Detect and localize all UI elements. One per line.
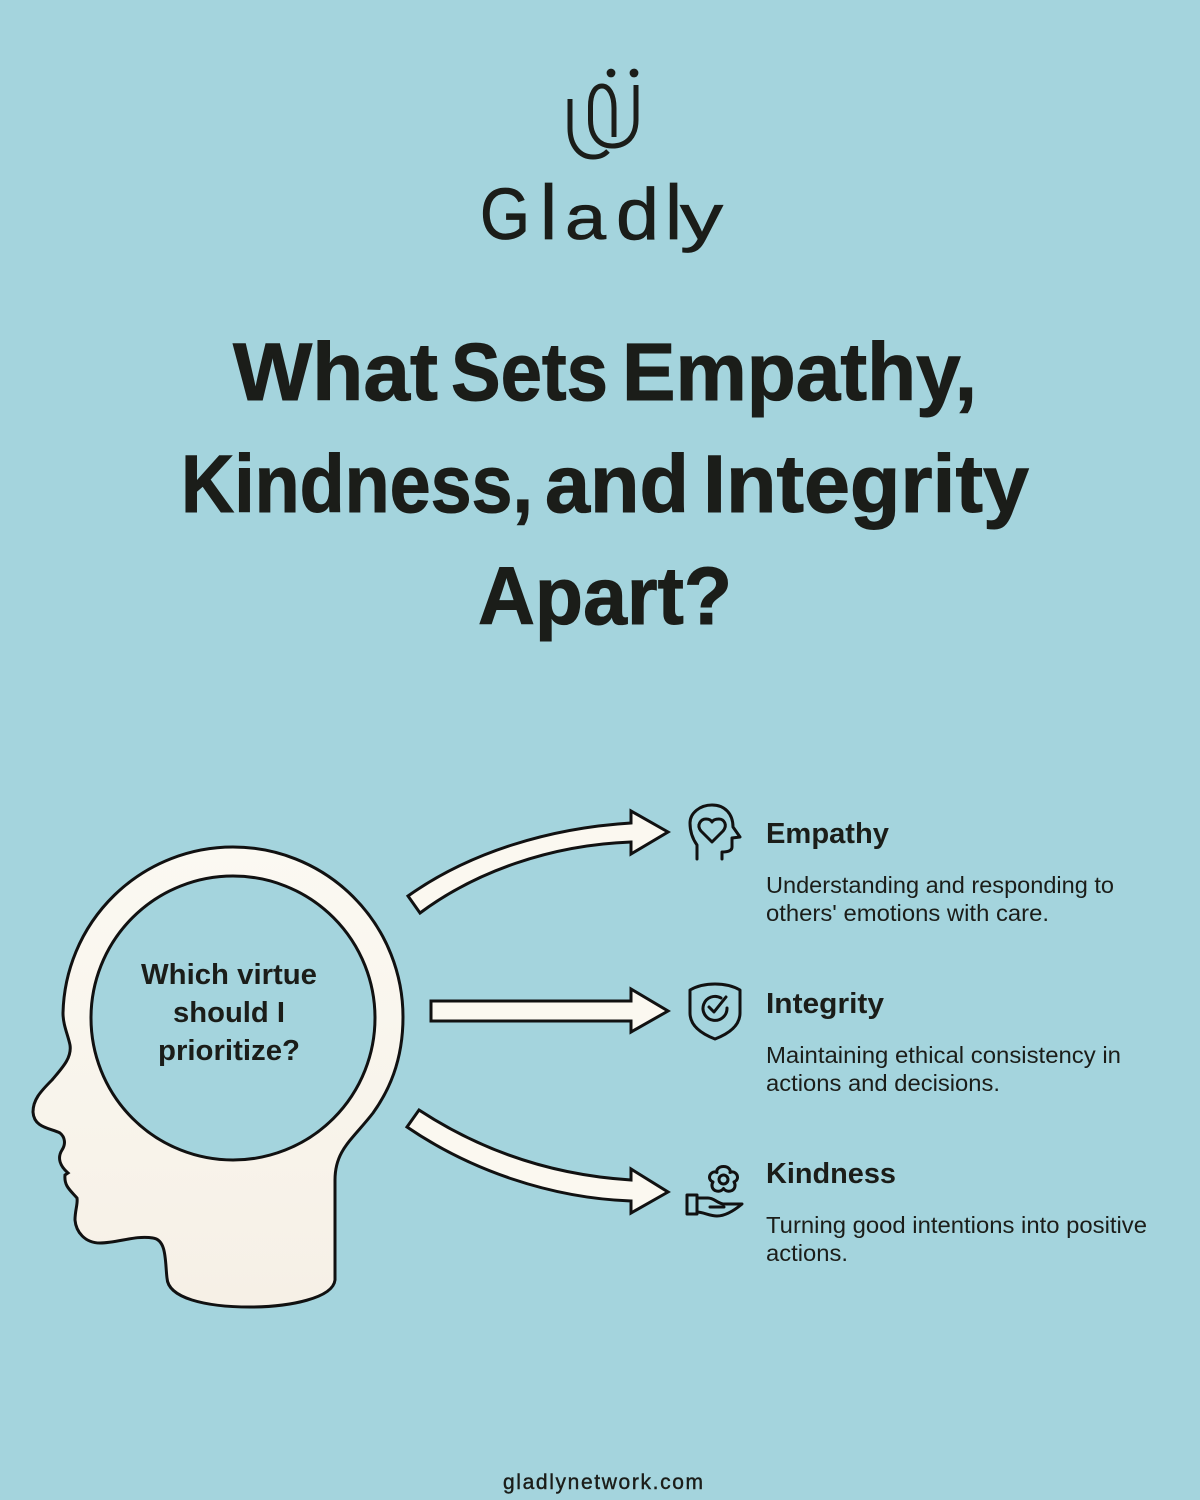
arrow: to Integrity xyxy=(431,989,668,1032)
item: Kindness xyxy=(687,1158,1147,1266)
logo wordmark: a xyxy=(565,184,607,253)
icon: shield with check xyxy=(690,984,740,1039)
description: Empathy: others' emotions with care. xyxy=(766,900,1049,926)
description: Kindness: Turning good intentions into positive xyxy=(766,1212,1147,1238)
logo wordmark: y xyxy=(680,181,723,253)
icon: head with heart xyxy=(690,805,740,859)
item: Integrity xyxy=(690,984,1121,1096)
head question text: Which virtue xyxy=(141,959,317,991)
description: Integrity: Maintaining ethical consistency in xyxy=(766,1042,1121,1068)
arrow: to Kindness xyxy=(407,1110,668,1213)
title: Kindness, xyxy=(181,439,533,530)
heading: Integrity: Integrity xyxy=(766,988,884,1020)
title: and xyxy=(545,439,689,530)
icon: hand holding flower xyxy=(687,1166,742,1216)
title: Empathy, xyxy=(622,327,977,418)
description: Integrity: actions and decisions. xyxy=(766,1070,1000,1096)
title: Sets xyxy=(451,327,608,418)
description: Kindness xyxy=(766,1212,1147,1266)
arrow: to Empathy xyxy=(408,811,668,913)
head silhouette xyxy=(33,847,403,1307)
head question text xyxy=(141,959,317,1067)
title xyxy=(181,327,1029,642)
logo wordmark: d xyxy=(616,175,659,255)
heading: Kindness: Kindness xyxy=(766,1158,896,1190)
logo wordmark: G xyxy=(480,175,530,255)
item: Empathy xyxy=(690,805,1114,926)
footer url: gladlynetwork.com xyxy=(503,1471,703,1494)
logo: Gladly xyxy=(480,69,723,256)
title: Apart? xyxy=(478,551,732,642)
logo mark xyxy=(570,69,638,157)
heading: Empathy: Empathy xyxy=(766,818,889,850)
description: Kindness: actions. xyxy=(766,1240,848,1266)
description: Empathy: Understanding and responding to xyxy=(766,872,1114,898)
title: What xyxy=(233,327,438,418)
description: Integrity xyxy=(766,1042,1121,1096)
title: Integrity xyxy=(703,439,1029,530)
head diagram xyxy=(33,847,403,1307)
logo wordmark: l xyxy=(540,170,557,256)
head question text: prioritize? xyxy=(158,1035,300,1067)
logo wordmark: l xyxy=(665,170,682,256)
head question text: should I xyxy=(173,997,285,1029)
description: Empathy xyxy=(766,872,1114,926)
logo wordmark xyxy=(480,170,723,256)
